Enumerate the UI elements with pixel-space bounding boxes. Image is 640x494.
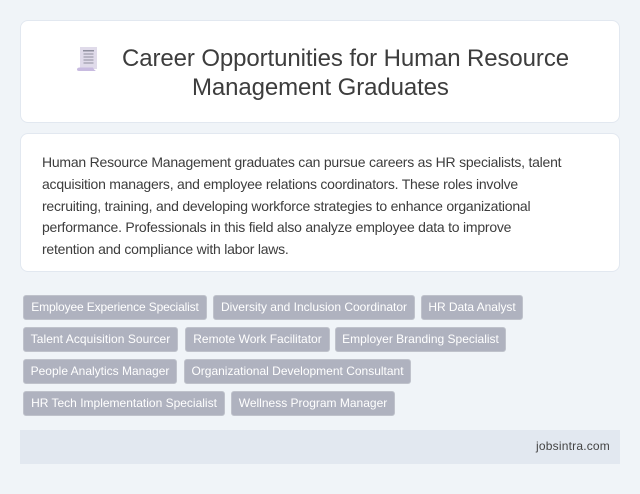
- icon: document scroll: [77, 47, 97, 71]
- tag: HR Tech Implementation Specialist: [31, 396, 217, 410]
- tag: [213, 295, 415, 320]
- tag: People Analytics Manager: [31, 364, 169, 378]
- tag: [23, 327, 178, 352]
- header panel: [20, 20, 620, 123]
- description text: acquisition managers, and employee relations coordinators. These roles involve: [42, 176, 518, 192]
- description text: retention and compliance with labor laws.: [42, 241, 289, 257]
- tag list: [23, 295, 523, 416]
- tag: [185, 327, 330, 352]
- tag: [23, 295, 207, 320]
- tag: Talent Acquisition Sourcer: [31, 332, 170, 346]
- description text: performance. Professionals in this field also analyze employee data to improve: [42, 219, 511, 235]
- description text: recruiting, training, and developing workforce strategies to enhance organizational: [42, 198, 530, 214]
- tag: [184, 359, 411, 384]
- tag: Wellness Program Manager: [239, 396, 387, 410]
- footer source text: jobsintra.com: [536, 439, 610, 453]
- description text: [42, 154, 562, 257]
- footer bar: [20, 430, 620, 464]
- tag: [23, 359, 177, 384]
- tag: Organizational Development Consultant: [191, 364, 404, 378]
- tag: [231, 391, 395, 416]
- description panel: [20, 133, 620, 272]
- tag: HR Data Analyst: [428, 300, 516, 314]
- description text: Human Resource Management graduates can pursue careers as HR specialists, talent: [42, 154, 561, 170]
- tag: Employee Experience Specialist: [31, 300, 199, 314]
- title: [122, 45, 569, 101]
- title: Management Graduates: [192, 74, 449, 101]
- tag: Remote Work Facilitator: [193, 332, 322, 346]
- tag: Employer Branding Specialist: [342, 332, 499, 346]
- title: Career Opportunities for Human Resource: [122, 45, 569, 72]
- tag: Diversity and Inclusion Coordinator: [221, 300, 407, 314]
- tag: [421, 295, 523, 320]
- tag: [335, 327, 506, 352]
- tag: [23, 391, 225, 416]
